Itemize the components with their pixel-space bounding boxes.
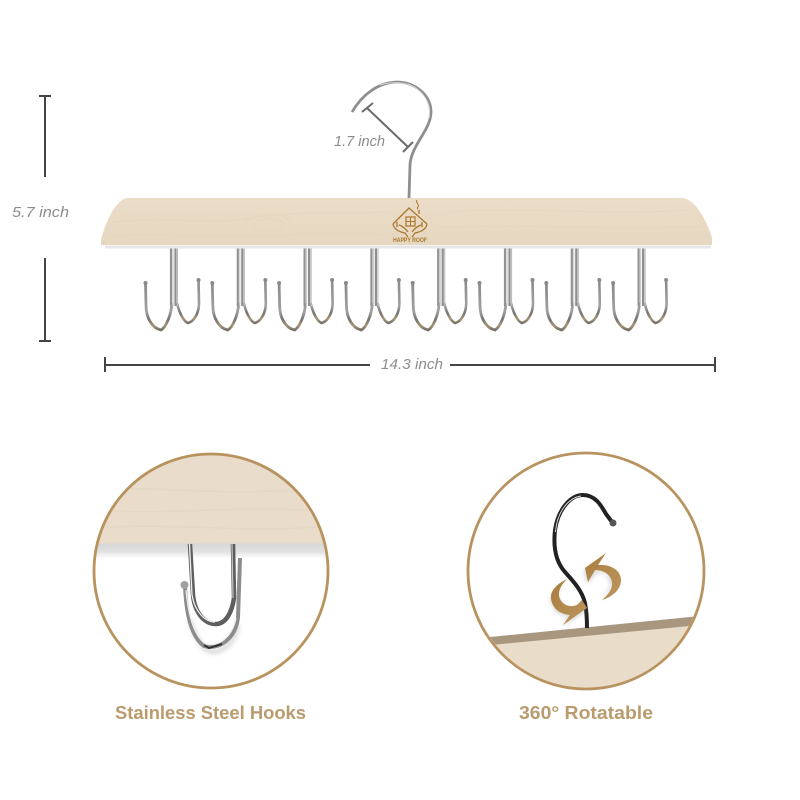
arrow shadows — [549, 568, 612, 626]
wooden bar in perspective — [491, 622, 691, 688]
vertical height dimension: 5.7 inch: 5.7 inch — [12, 204, 69, 221]
main rotating hanging hook — [352, 82, 431, 198]
outer steel hook — [180, 558, 240, 648]
hook diameter dimension: 1.7 inch: 1.7 inch — [334, 133, 385, 150]
detail circle: stainless steel hooks — [90, 450, 330, 688]
happy roof logo: HAPPY ROOF — [393, 237, 427, 244]
row of eight double hooks — [144, 246, 668, 330]
width dimension: 14.3 inch — [105, 356, 715, 373]
wooden bar — [101, 198, 712, 247]
lower rotation arrow — [551, 579, 587, 625]
hook diameter dimension: 1.7 inch — [334, 103, 413, 152]
hook shadow — [190, 620, 238, 652]
upper rotation arrow — [585, 553, 621, 600]
detail circle: 360 degree rotation — [468, 453, 710, 700]
caption: stainless steel hooks: Stainless Steel Hooks — [115, 703, 306, 723]
vertical height dimension: 5.7 inch — [12, 96, 69, 341]
inner steel hook — [190, 544, 234, 624]
happy roof logo — [393, 200, 427, 244]
width dimension: 14.3 inch: 14.3 inch — [381, 356, 443, 373]
black rotating hook — [554, 495, 616, 628]
hanger product image — [101, 82, 712, 330]
caption: 360 rotatable: 360° Rotatable — [519, 703, 653, 723]
